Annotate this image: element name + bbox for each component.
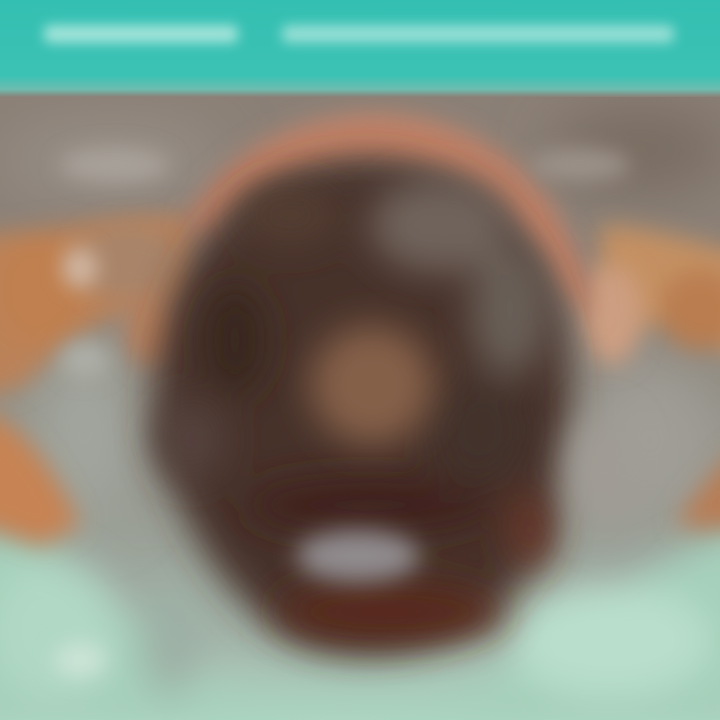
hair: [154, 159, 571, 653]
shirt: [0, 520, 720, 720]
left forearm: [0, 215, 190, 400]
right hand: [582, 265, 642, 365]
right side haze over hair edge: [565, 415, 635, 525]
hands over head: [185, 114, 591, 320]
scalp patch: [310, 325, 434, 445]
hair clip highlight: [296, 530, 420, 582]
right lower arm: [675, 440, 720, 528]
header banner: [0, 0, 720, 97]
header heading, right part: [282, 25, 674, 43]
right forearm: [600, 225, 720, 375]
tonal patches: [155, 177, 552, 642]
hair shading: [155, 177, 552, 642]
background haze: [0, 110, 720, 520]
left hand: [75, 224, 185, 368]
left lower arm: [0, 410, 80, 545]
header heading, left part: [44, 25, 238, 43]
small pale highlights: [54, 147, 630, 678]
